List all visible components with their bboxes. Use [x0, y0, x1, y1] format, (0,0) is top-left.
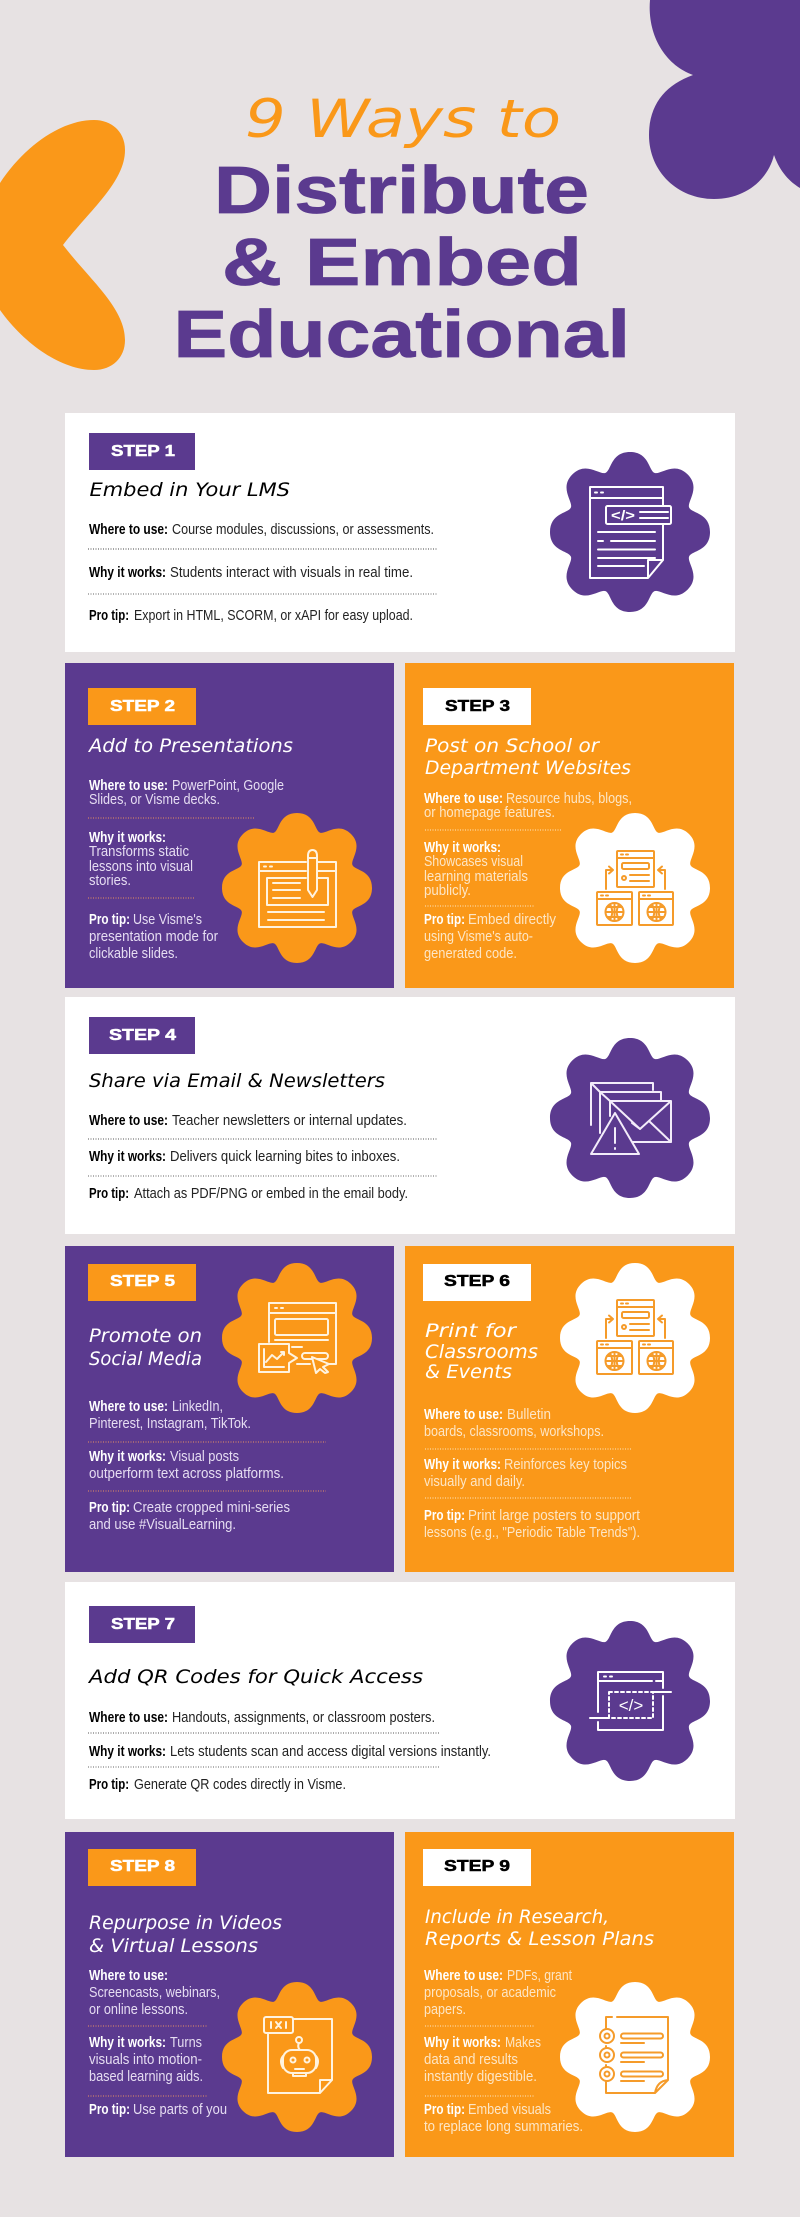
heading: step 5 [89, 1325, 202, 1370]
panel: step 3 [405, 663, 734, 988]
text: why it works: Turns [170, 2035, 202, 2051]
text: pro tip: Pro tip: [89, 912, 130, 928]
badge: step 2 [88, 688, 196, 725]
text: why it works: instantly digestible. [424, 2069, 537, 2085]
text: pro tip: Create cropped mini-series [133, 1500, 290, 1516]
text: where to use [424, 1968, 572, 2018]
text: where to use: Handouts, assignments, or classroom posters. [172, 1710, 435, 1726]
text: pro tip: Use Visme's [133, 912, 202, 928]
text: pro tip: to replace long summaries. [424, 2119, 583, 2135]
panel: step 1 [65, 413, 735, 652]
panel: step 8 [65, 1832, 394, 2157]
text: why it works: Showcases visual [424, 854, 523, 870]
badge: step 5 [88, 1264, 196, 1301]
panel: step 2 [65, 663, 394, 988]
text: why it works: outperform text across platforms. [89, 1466, 284, 1482]
text: where to use: Screencasts, webinars, [89, 1985, 220, 2001]
badge: step 2: STEP 2 [110, 698, 175, 715]
heading: step 8: & Virtual Lessons [89, 1935, 258, 1957]
text: why it works: stories. [89, 873, 131, 889]
title: script line: 9 Ways to [245, 89, 561, 150]
heading: step 2: Add to Presentations [87, 735, 293, 757]
text: why it works [89, 1449, 284, 1482]
text: pro tip: Pro tip: [424, 1508, 465, 1524]
text: where to use [89, 778, 284, 808]
text: why it works: Why it works: [89, 2035, 166, 2051]
text: pro tip: Pro tip: [424, 2102, 465, 2118]
text: why it works: Lets students scan and access digital versions instantly. [170, 1744, 491, 1760]
badge: step 8 [88, 1849, 196, 1886]
text: why it works: Why it works: [89, 1149, 166, 1165]
heading: step 3 [425, 735, 631, 779]
text: why it works: Makes [505, 2035, 541, 2051]
text: why it works: Why it works: [89, 1449, 166, 1465]
text: why it works: Why it works: [89, 565, 166, 581]
text: why it works: Why it works: [424, 840, 501, 856]
text: where to use: Slides, or Visme decks. [89, 792, 220, 808]
text: pro tip: Print large posters to support [468, 1508, 640, 1524]
text: why it works [89, 1149, 400, 1165]
text: pro tip: Use parts of you [133, 2102, 227, 2118]
text: pro tip: and use #VisualLearning. [89, 1517, 236, 1533]
icon: embed code document: </> [611, 507, 635, 523]
text: why it works: Delivers quick learning bites to inboxes. [170, 1149, 400, 1165]
icon: connected web pages [560, 1263, 710, 1413]
title: line 3: Educational [174, 297, 630, 372]
text: why it works: Why it works: [89, 1744, 166, 1760]
heading: step 3: Department Websites [425, 757, 631, 779]
text: why it works: lessons into visual [89, 859, 193, 875]
heading: step 7: Add QR Codes for Quick Access [87, 1666, 423, 1688]
heading: step 8: Repurpose in Videos [89, 1912, 282, 1934]
text: pro tip [89, 2102, 227, 2118]
badge: step 9: STEP 9 [444, 1858, 510, 1875]
text: why it works: learning materials [424, 869, 528, 885]
icon: social media analytics window [222, 1263, 372, 1413]
badge: step 3 [423, 688, 531, 725]
text: pro tip [89, 912, 218, 962]
text: where to use: boards, classrooms, workshops. [424, 1424, 604, 1440]
text: pro tip: using Visme's auto- [424, 929, 533, 945]
badge: step 8: STEP 8 [110, 1858, 175, 1875]
text: why it works: Students interact with visuals in real time. [170, 565, 413, 581]
badge: step 7: STEP 7 [111, 1616, 175, 1633]
heading: step 5: Promote on [89, 1325, 202, 1347]
text: why it works: Transforms static [89, 844, 189, 860]
heading: step 4: Share via Email & Newsletters [89, 1070, 385, 1092]
text: where to use: or homepage features. [424, 805, 555, 821]
text: pro tip: presentation mode for [89, 929, 218, 945]
badge: step 3: STEP 3 [445, 698, 510, 715]
text: why it works [424, 2035, 541, 2085]
text: pro tip: lessons (e.g., "Periodic Table Trends"). [424, 1525, 640, 1541]
heading: step 6: Classrooms [425, 1341, 538, 1363]
heading: step 6: & Events [425, 1361, 512, 1383]
text: where to use [424, 1407, 604, 1440]
text: why it works: Why it works: [424, 2035, 501, 2051]
text: where to use: papers. [424, 2002, 466, 2018]
text: pro tip: Pro tip: [89, 1186, 129, 1202]
badge: step 6: STEP 6 [444, 1273, 510, 1290]
icon: checklist document [560, 1982, 710, 2132]
text: why it works [89, 830, 193, 889]
text: why it works: Why it works: [424, 1457, 501, 1473]
badge: step 4 [89, 1017, 195, 1054]
badge: step 1 [89, 433, 195, 470]
text: pro tip: Export in HTML, SCORM, or xAPI for easy upload. [134, 608, 413, 624]
text: why it works: based learning aids. [89, 2069, 203, 2085]
text: pro tip: Pro tip: [424, 912, 465, 928]
text: why it works: Why it works: [89, 830, 166, 846]
text: where to use: Teacher newsletters or internal updates. [172, 1113, 407, 1129]
text: where to use: Where to use: [89, 1399, 168, 1415]
text: why it works: publicly. [424, 883, 471, 899]
text: where to use: Where to use: [424, 1407, 503, 1423]
text: where to use [89, 1113, 407, 1129]
text: pro tip: Generate QR codes directly in Visme. [134, 1777, 346, 1793]
text: where to use: Course modules, discussions, or assessments. [172, 522, 434, 538]
text: pro tip: Embed directly [468, 912, 557, 928]
panel: step 9 [405, 1832, 734, 2157]
text: pro tip: clickable slides. [89, 946, 178, 962]
heading: step 9: Reports & Lesson Plans [425, 1928, 654, 1950]
badge: step 6 [423, 1264, 531, 1301]
badge: step 7 [89, 1606, 195, 1643]
text: where to use: proposals, or academic [424, 1985, 556, 2001]
text: where to use [89, 1968, 220, 2018]
text: pro tip: Attach as PDF/PNG or embed in the email body. [134, 1186, 408, 1202]
text: where to use [424, 791, 632, 821]
heading: step 6 [425, 1320, 538, 1383]
text: pro tip [424, 912, 557, 962]
text: where to use: Where to use: [89, 778, 168, 794]
text: why it works: visually and daily. [424, 1474, 525, 1490]
panel: step 7 [65, 1582, 735, 1819]
text: where to use: Where to use: [424, 791, 503, 807]
text: where to use: LinkedIn, [172, 1399, 223, 1415]
decoration: orange heart shape [0, 120, 125, 370]
text: why it works: visuals into motion- [89, 2052, 202, 2068]
text: where to use: Where to use: [89, 1710, 168, 1726]
heading: step 6: Print for [425, 1320, 517, 1342]
icon: robot document [222, 1982, 372, 2132]
heading: step 9 [425, 1906, 654, 1950]
text: where to use: PowerPoint, Google [172, 778, 284, 794]
title [174, 89, 630, 372]
text: why it works: Reinforces key topics [504, 1457, 627, 1473]
badge: step 5: STEP 5 [110, 1273, 175, 1290]
text: pro tip: Pro tip: [89, 1777, 129, 1793]
heading: step 8 [89, 1912, 282, 1957]
text: why it works: data and results [424, 2052, 518, 2068]
text: where to use [89, 1399, 251, 1432]
heading: step 1: Embed in Your LMS [90, 479, 290, 501]
title: line 1: Distribute [214, 153, 589, 228]
title: line 2: & Embed [222, 225, 582, 300]
text: where to use: Where to use: [89, 1968, 168, 1984]
decoration: purple flower shape [649, 0, 800, 199]
icon: envelopes with warning [550, 1038, 710, 1198]
text: pro tip: Embed visuals [468, 2102, 551, 2118]
icon: connected web pages [560, 813, 710, 963]
icon: presentation with pencil [222, 813, 372, 963]
text: where to use: PDFs, grant [507, 1968, 572, 1984]
text: where to use: Where to use: [89, 522, 168, 538]
text: pro tip [424, 2102, 583, 2135]
text: why it works: Visual posts [170, 1449, 239, 1465]
text: pro tip: Pro tip: [89, 2102, 130, 2118]
badge: step 1: STEP 1 [111, 443, 175, 460]
text: pro tip [424, 1508, 640, 1541]
text: where to use: Resource hubs, blogs, [506, 791, 632, 807]
text: why it works [89, 2035, 203, 2085]
text: pro tip: generated code. [424, 946, 517, 962]
badge: step 9 [423, 1849, 531, 1886]
text: where to use: Where to use: [424, 1968, 503, 1984]
panel: step 6 [405, 1246, 734, 1572]
text: where to use: Where to use: [89, 1113, 168, 1129]
text: pro tip [89, 1500, 290, 1533]
heading: step 9: Include in Research, [425, 1906, 609, 1928]
text: pro tip: Pro tip: [89, 1500, 130, 1516]
text: why it works [424, 840, 528, 899]
heading: step 5: Social Media [89, 1348, 202, 1370]
icon: code window: </> [619, 1696, 643, 1715]
text: where to use: Bulletin [507, 1407, 551, 1423]
text: where to use [89, 522, 434, 538]
text: pro tip: Pro tip: [89, 608, 129, 624]
text: why it works [424, 1457, 627, 1490]
icon: code window [550, 1621, 710, 1781]
text: where to use: Pinterest, Instagram, TikTok. [89, 1416, 251, 1432]
panel: step 4 [65, 997, 735, 1234]
text: where to use: or online lessons. [89, 2002, 188, 2018]
text: where to use [89, 1710, 435, 1726]
panel: step 5 [65, 1246, 394, 1572]
heading: step 3: Post on School or [425, 735, 600, 757]
icon: embed code document [550, 452, 710, 612]
badge: step 4: STEP 4 [109, 1027, 176, 1044]
